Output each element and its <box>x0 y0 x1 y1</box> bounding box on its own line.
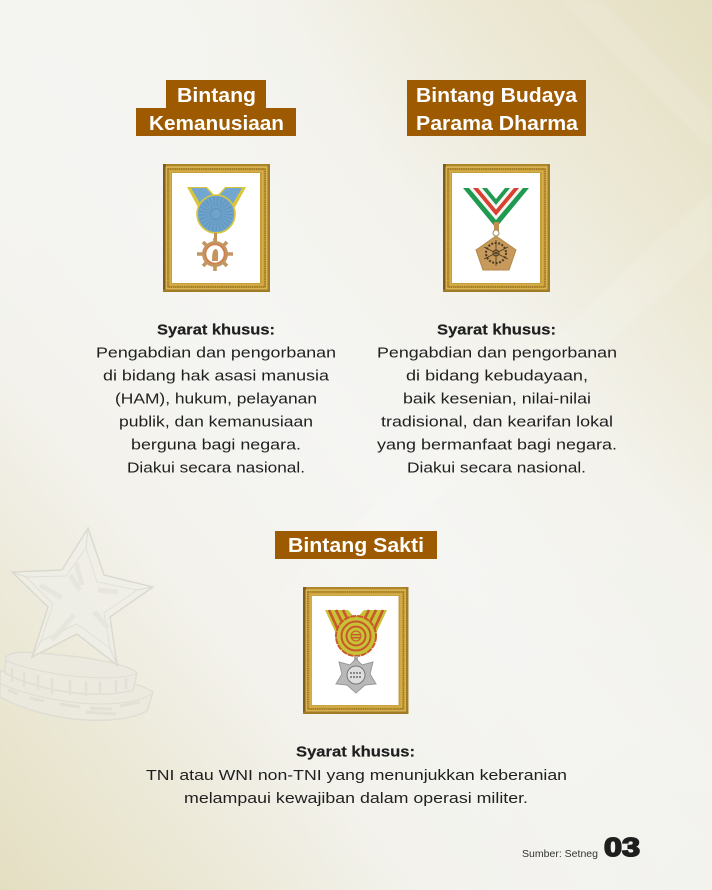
framed medal: Bintang Sakti <box>303 587 408 714</box>
framed medal: Bintang Budaya Parama Dharma <box>443 164 550 292</box>
lower base <box>0 671 153 720</box>
text: syarat khusus Bintang Budaya Parama Dharma: Syarat khusus: <box>437 321 556 338</box>
text: syarat khusus Bintang Kemanusiaan: (HAM), hukum, pelayanan <box>115 390 317 407</box>
text: syarat khusus Bintang Kemanusiaan: di bidang hak asasi manusia <box>103 367 330 384</box>
heading: Bintang Kemanusiaan <box>136 80 296 136</box>
text: syarat khusus Bintang Sakti: Syarat khusus: <box>296 744 415 760</box>
heading: Bintang Budaya Parama Dharma: Parama Dharma <box>416 113 579 135</box>
heading: Bintang Sakti: Bintang Sakti <box>288 535 424 557</box>
panel: Bintang Sakti <box>146 531 567 807</box>
panel: Bintang Kemanusiaan <box>96 80 336 476</box>
text: syarat khusus Bintang Kemanusiaan: publik, dan kemanusiaan <box>119 413 313 430</box>
source note: Sumber: Setneg <box>522 848 598 860</box>
decorative star trophy <box>0 528 153 720</box>
text: syarat khusus Bintang Budaya Parama Dharma: Diakui secara nasional. <box>407 459 586 476</box>
heading: Bintang Budaya Parama Dharma <box>407 80 586 136</box>
text: syarat khusus Bintang Sakti: TNI atau WNI non-TNI yang menunjukkan keberanian <box>146 767 567 784</box>
star body <box>12 528 153 665</box>
text: syarat khusus Bintang Kemanusiaan: berguna bagi negara. <box>131 436 301 453</box>
text: syarat khusus Bintang Kemanusiaan: Pengabdian dan pengorbanan <box>96 344 336 361</box>
text: syarat khusus Bintang Budaya Parama Dharma: baik kesenian, nilai-nilai <box>403 390 591 407</box>
upper base <box>5 652 137 694</box>
heading: Bintang Sakti <box>275 531 437 559</box>
framed medal: Bintang Kemanusiaan <box>163 164 270 292</box>
heading: Bintang Kemanusiaan: Bintang <box>177 85 256 107</box>
text: syarat khusus Bintang Budaya Parama Dharma: Pengabdian dan pengorbanan <box>377 344 617 361</box>
heading: Bintang Kemanusiaan: Kemanusiaan <box>149 113 284 135</box>
text: syarat khusus Bintang Kemanusiaan: Syarat khusus: <box>157 321 275 338</box>
panel: Bintang Budaya Parama Dharma <box>377 80 617 476</box>
text: syarat khusus Bintang Kemanusiaan: Diakui secara nasional. <box>127 459 305 476</box>
text: syarat khusus Bintang Budaya Parama Dharma: tradisional, dan kearifan lokal <box>381 413 613 430</box>
text: syarat khusus Bintang Kemanusiaan <box>96 321 336 476</box>
heading: Bintang Budaya Parama Dharma: Bintang Budaya <box>416 85 578 107</box>
text: syarat khusus Bintang Sakti: melampaui kewajiban dalam operasi militer. <box>184 790 528 807</box>
text: syarat khusus Bintang Budaya Parama Dharma: yang bermanfaat bagi negara. <box>377 436 617 453</box>
text: syarat khusus Bintang Budaya Parama Dharma: di bidang kebudayaan, <box>406 367 588 384</box>
text: syarat khusus Bintang Budaya Parama Dharma <box>377 321 617 476</box>
text: syarat khusus Bintang Sakti <box>146 744 567 807</box>
page number: 03 <box>604 832 640 862</box>
